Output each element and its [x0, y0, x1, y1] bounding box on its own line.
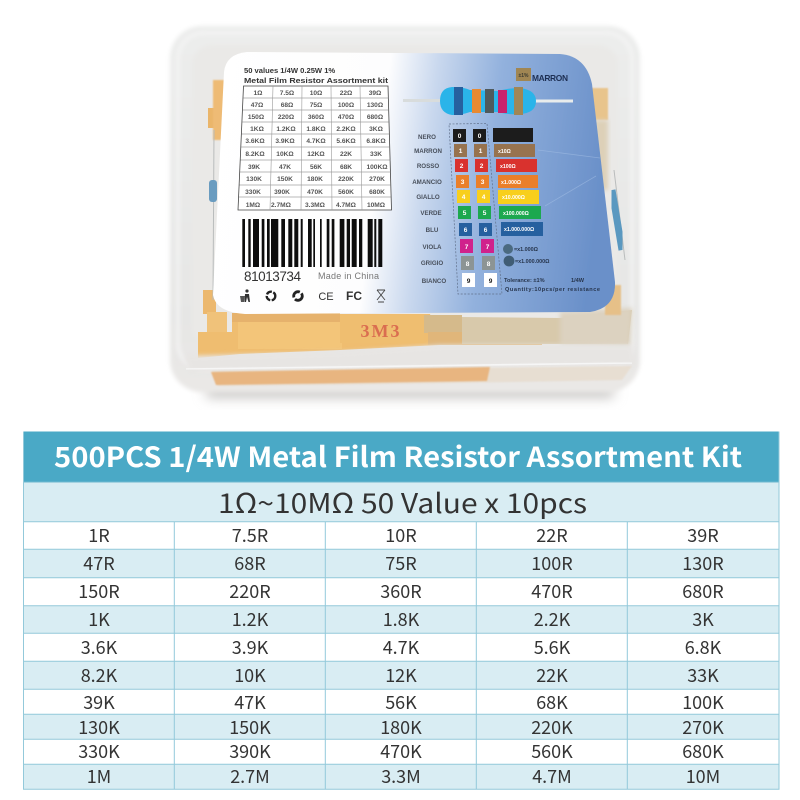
table values: 3K — [692, 606, 714, 632]
digit squares: 3 — [461, 179, 465, 186]
colour names: VERDE — [420, 210, 442, 217]
box shell — [170, 26, 640, 392]
3M3 strip label — [340, 315, 424, 343]
barcode — [242, 219, 382, 267]
logo: 1% marron tag: ±1% — [519, 73, 529, 79]
digit squares: 1 — [459, 148, 463, 155]
sticker title — [244, 66, 389, 85]
mini value table: 180K — [307, 176, 323, 183]
mini value table: 10Ω — [310, 90, 323, 97]
icon: recycle — [267, 292, 275, 300]
mini value table: 33K — [370, 151, 382, 158]
colour names: VIOLA — [423, 244, 442, 251]
table values: 75R — [385, 550, 417, 576]
table values: 100K — [682, 689, 724, 715]
icon: crossed bin — [377, 290, 385, 302]
digit squares: 5 — [463, 210, 467, 217]
dashed digit columns frame — [449, 124, 502, 294]
table values: 68R — [234, 550, 266, 576]
mini value table: 1KΩ — [250, 126, 265, 133]
table values: 8.2K — [81, 662, 118, 688]
table values: 100R — [531, 550, 573, 576]
tolerance and quantity text: Quantity:10pcs/per resistance — [505, 287, 600, 293]
digit squares: 8 — [466, 261, 470, 268]
table values: 150R — [78, 578, 120, 604]
mini value table: 47Ω — [251, 102, 264, 109]
mini value table: 47K — [279, 164, 291, 171]
mini value table: 3.9KΩ — [275, 138, 295, 145]
table subheader — [24, 482, 779, 522]
multiplier bars: x1.000Ω — [501, 180, 521, 186]
mini value table: 270K — [369, 176, 385, 183]
KΩ and MΩ notes — [503, 244, 550, 266]
mini value table: 10MΩ — [367, 202, 386, 209]
mini value table: 7.5Ω — [280, 90, 295, 97]
table values: 1K — [88, 606, 110, 632]
table values: 3.9K — [232, 634, 269, 660]
colour names: AMANCIO — [412, 179, 442, 186]
table values: 5.6K — [534, 634, 571, 660]
product photo: plastic resistor box — [170, 26, 640, 398]
specification table — [24, 432, 779, 789]
mini value table: 150K — [277, 176, 293, 183]
multiplier bars: x10Ω — [498, 149, 511, 155]
mini value table: 10KΩ — [276, 151, 294, 158]
digit squares — [453, 129, 497, 287]
table values: 10R — [385, 522, 417, 548]
multiplier bars: x100Ω — [500, 164, 516, 170]
table values: 3.3M — [381, 763, 421, 789]
digit squares: 8 — [487, 261, 491, 268]
logo: 1% marron tag — [516, 68, 568, 83]
colour names: MARRON — [414, 148, 442, 155]
mini value table: 150Ω — [248, 114, 265, 121]
table values: 39R — [687, 522, 719, 548]
mini value table: 2.7MΩ — [271, 202, 292, 209]
barcode number: 81013734 — [244, 269, 301, 284]
mini value table: 360Ω — [308, 114, 325, 121]
mini value table: 130Ω — [367, 102, 384, 109]
table values: 680K — [682, 738, 724, 764]
alternating row fills — [24, 549, 779, 789]
table values: 12K — [385, 662, 417, 688]
mini value table: 3.6KΩ — [245, 138, 265, 145]
table values: 2.7M — [230, 763, 270, 789]
mini value table: 39Ω — [369, 90, 382, 97]
table values: 180K — [380, 714, 422, 740]
box shadow — [205, 386, 615, 398]
loose resistors — [209, 130, 625, 300]
colour names: BIANCO — [422, 278, 446, 285]
mini value table: 220Ω — [278, 114, 295, 121]
mini value table: 470K — [307, 189, 323, 196]
mini value table: 22K — [340, 151, 352, 158]
mini value table: 130K — [246, 176, 262, 183]
mini value table: 4.7MΩ — [336, 202, 357, 209]
mini value table: 75Ω — [310, 102, 323, 109]
mini value table: 1.2KΩ — [276, 126, 296, 133]
table values: 4.7M — [532, 763, 572, 789]
mini value table: 3.3MΩ — [305, 202, 326, 209]
box lip band — [184, 345, 636, 386]
digit squares: 1 — [479, 148, 483, 155]
orange resistor paper strips — [198, 80, 632, 358]
table values: 220R — [229, 578, 271, 604]
multiplier bars: x100.000Ω — [503, 211, 529, 217]
icon: waste bin — [240, 289, 250, 302]
sticker title: Metal Film Resistor Assortment kit — [244, 76, 389, 85]
table values: 130K — [78, 714, 120, 740]
colour names — [412, 134, 446, 285]
digit squares: 6 — [484, 227, 488, 234]
table values: 1M — [87, 763, 111, 789]
digit squares: 9 — [467, 278, 471, 285]
table values: 1.2K — [232, 606, 269, 632]
table values: 39K — [83, 689, 115, 715]
table values: 390K — [229, 738, 271, 764]
digit squares: 6 — [464, 227, 468, 234]
table values: 150K — [229, 714, 271, 740]
table values: 10K — [234, 662, 266, 688]
colour names: ROSSO — [417, 163, 439, 170]
icon: FCC mark: FC — [346, 289, 362, 303]
table values: 10M — [686, 763, 720, 789]
table subheader: 1Ω~10MΩ 50 Value x 10pcs — [218, 482, 587, 521]
digit squares: 4 — [482, 194, 486, 201]
table values: 470K — [380, 738, 422, 764]
table values: 22R — [536, 522, 568, 548]
colour names: GRIGIO — [421, 260, 443, 267]
table values: 4.7K — [383, 634, 420, 660]
mini value table: 68K — [340, 164, 352, 171]
table values: 56K — [385, 689, 417, 715]
mini value table: 68Ω — [281, 102, 294, 109]
mini value table: 560K — [338, 189, 354, 196]
digit squares: 9 — [489, 278, 493, 285]
digit squares: 0 — [458, 133, 462, 140]
table values: 220K — [531, 714, 573, 740]
KΩ and MΩ notes: =x1.000Ω — [514, 247, 539, 253]
digit squares: 2 — [480, 163, 484, 170]
table values: 330K — [78, 738, 120, 764]
resistor illustration — [403, 87, 573, 115]
table values: 68K — [536, 689, 568, 715]
table values: 560K — [531, 738, 573, 764]
sticker background light streaks — [538, 150, 600, 206]
colour names: BLU — [426, 227, 439, 234]
table values: 680R — [682, 578, 724, 604]
tolerance and quantity text — [504, 278, 600, 293]
digit squares: 4 — [462, 194, 466, 201]
multiplier bars — [493, 128, 543, 236]
KΩ and MΩ notes: =x1.000.000Ω — [515, 259, 550, 265]
mini value table: 2.2KΩ — [336, 126, 356, 133]
table values: 22K — [536, 662, 568, 688]
mini value table: 4.7KΩ — [306, 138, 326, 145]
mini value table: 56K — [310, 164, 322, 171]
table values: 1R — [88, 522, 110, 548]
mini value table: 1MΩ — [246, 202, 261, 209]
tolerance and quantity text: Tolerance: ±1% — [504, 278, 545, 284]
table values: 360R — [380, 578, 422, 604]
mini value table: 220K — [338, 176, 354, 183]
digit squares: 5 — [483, 210, 487, 217]
table values: 33K — [687, 662, 719, 688]
colour names: NERO — [418, 134, 436, 141]
table values: 47K — [234, 689, 266, 715]
digit squares: 3 — [481, 179, 485, 186]
sticker title: 50 values 1/4W 0.25W 1% — [244, 66, 335, 75]
product sticker — [213, 52, 615, 314]
3M3 strip label: 3M3 — [360, 321, 402, 341]
colour names: GIALLO — [416, 194, 440, 201]
mini value table — [238, 86, 392, 210]
mini value table: 1Ω — [254, 90, 263, 97]
mini value table: 100Ω — [338, 102, 355, 109]
table header: 500PCS 1/4W Metal Film Resistor Assortment Kit — [54, 436, 742, 476]
certification icons — [240, 289, 385, 303]
icon: green dot — [294, 292, 302, 300]
table values: 2.2K — [534, 606, 571, 632]
table header — [24, 432, 779, 482]
mini value table: 680K — [369, 189, 385, 196]
table values: 47R — [83, 550, 115, 576]
digit squares: 2 — [460, 163, 464, 170]
mini value table: 6.8KΩ — [366, 138, 386, 145]
digit squares: 7 — [486, 244, 490, 251]
mini value table: 680Ω — [367, 114, 384, 121]
mini value table: 3KΩ — [369, 126, 384, 133]
table values: 7.5R — [232, 522, 268, 548]
mini value table: 100KΩ — [366, 164, 388, 171]
digit squares: 7 — [465, 244, 469, 251]
table values: 1.8K — [383, 606, 420, 632]
table values: 270K — [682, 714, 724, 740]
table values: 3.6K — [81, 634, 118, 660]
table values: 6.8K — [685, 634, 722, 660]
digit squares: 0 — [478, 133, 482, 140]
mini value table: 330K — [245, 189, 261, 196]
made in china: Made in China — [318, 271, 379, 281]
table values — [78, 522, 724, 789]
mini value table: 22Ω — [340, 90, 353, 97]
mini value table: 5.6KΩ — [336, 138, 356, 145]
mini value table: 470Ω — [338, 114, 355, 121]
table values: 470R — [531, 578, 573, 604]
mini value table: 39K — [248, 164, 260, 171]
logo: 1% marron tag: MARRON — [532, 73, 568, 83]
table values: 130R — [682, 550, 724, 576]
mini value table: 1.8KΩ — [306, 126, 326, 133]
mini value table: 8.2KΩ — [245, 151, 265, 158]
multiplier bars: x10.000Ω — [502, 195, 525, 201]
mini value table: 12KΩ — [307, 151, 325, 158]
icon: CE mark: CE — [318, 291, 334, 303]
multiplier bars: x1.000.000Ω — [504, 227, 534, 233]
mini value table: 390K — [274, 189, 290, 196]
sticker background — [213, 52, 615, 314]
tolerance and quantity text: 1/4W — [571, 278, 585, 284]
